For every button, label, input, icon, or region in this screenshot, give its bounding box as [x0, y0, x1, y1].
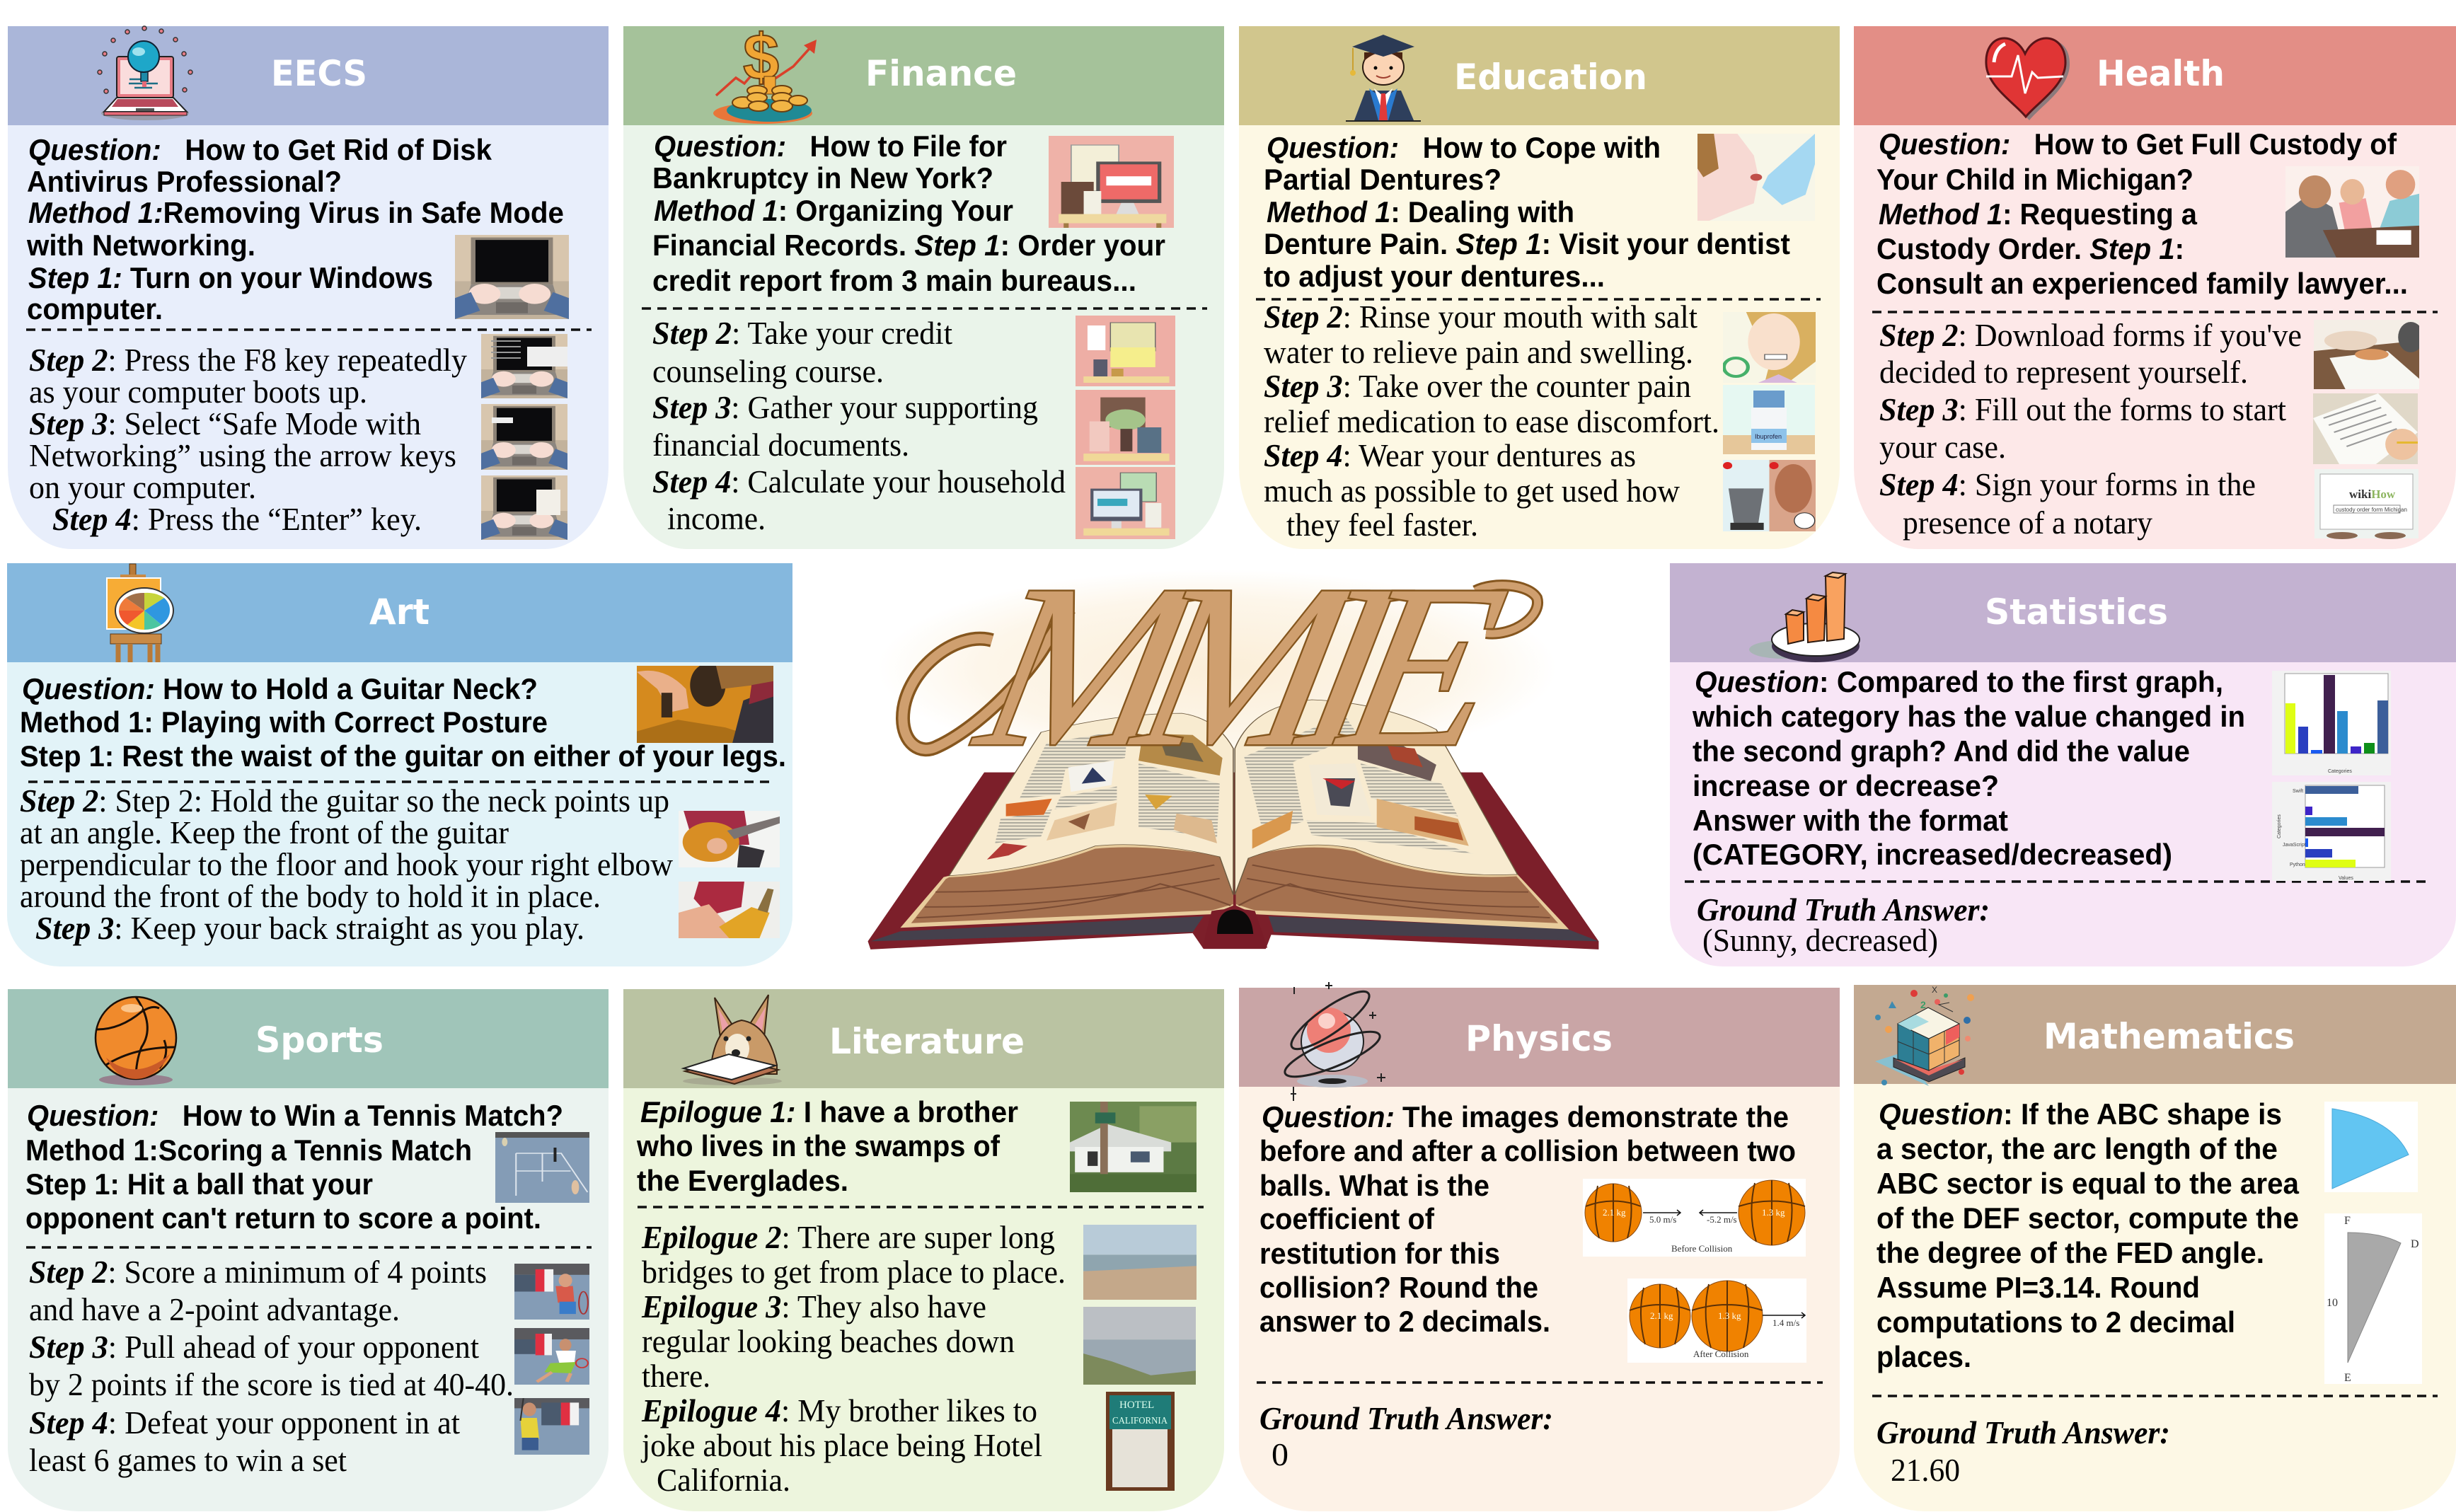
text block: Finance steps: financial documents.	[652, 427, 909, 463]
text block: EECS question: computer.	[27, 292, 163, 325]
text block: EECS question: Method 1:Removing Virus in Safe Mode	[28, 196, 564, 229]
text block: Health steps: your case.	[1879, 429, 2006, 465]
text block: Education question: Method 1: Dealing with	[1267, 195, 1574, 229]
text block: Literature epilogues: Epilogue 3: They also have	[641, 1289, 986, 1325]
icon: basketball	[96, 997, 176, 1085]
text block: Education question	[1264, 131, 1790, 293]
image: lake	[1083, 1307, 1196, 1385]
text block: Health question: Method 1: Requesting a	[1879, 197, 2198, 231]
text block: Health question	[1876, 127, 2408, 300]
text block: Statistics answer: Ground Truth Answer:	[1697, 892, 1990, 928]
chart: sector ABC	[2324, 1102, 2418, 1192]
text block: Art steps: perpendicular to the floor and hook your right elbow	[20, 847, 673, 882]
text block: Finance question: Financial Records. Step 1: Order your	[652, 229, 1165, 262]
text block: EECS question: with Networking.	[26, 229, 255, 262]
text block: Finance question: credit report from 3 main bureaus...	[652, 264, 1136, 297]
text block: EECS steps: Step 4: Press the “Enter” key.	[52, 502, 422, 537]
text block: Education question: to adjust your dentures...	[1264, 260, 1605, 293]
image: tennis court	[495, 1132, 589, 1203]
text block: EECS steps: on your computer.	[29, 470, 256, 505]
text block: EECS question: Antivirus Professional?	[27, 165, 342, 198]
image: after collision: 1.3 kg	[1718, 1310, 1741, 1321]
text block: Literature epilogues: California.	[657, 1462, 790, 1498]
text block: Health steps: decided to represent yourself.	[1879, 354, 2248, 390]
image: before collision	[1583, 1179, 1806, 1257]
heading: Education: Education	[1454, 57, 1647, 98]
text block: Sports question: Question: How to Win a Tennis Match?	[27, 1099, 563, 1133]
icon: heart	[1986, 38, 2070, 120]
image: guitarist front	[679, 811, 780, 867]
text block: Art steps: around the front of the body to hold it in place.	[20, 879, 601, 914]
panel: EECS	[8, 26, 609, 549]
image: family lawyer	[2285, 170, 2419, 258]
text block: Statistics question: the second graph? And did the value	[1693, 734, 2190, 768]
text block: Mathematics answer: 21.60	[1891, 1453, 1960, 1488]
icon: dog reading book	[683, 995, 782, 1085]
text block: Health steps: Step 2: Download forms if you've	[1879, 318, 2302, 353]
text block: Literature epilogues: there.	[642, 1358, 710, 1394]
image: laptop step 3	[481, 404, 567, 470]
text block: Art question: Method 1: Playing with Correct Posture	[20, 705, 548, 739]
heading: Art: Art	[369, 591, 429, 633]
text block: Physics question: collision? Round the	[1259, 1271, 1538, 1304]
text block: Mathematics question: of the DEF sector, compute the	[1876, 1201, 2299, 1235]
text block: Finance question: Bankruptcy in New York?	[652, 161, 993, 195]
chart: vertical bars: Categories	[2328, 769, 2352, 774]
text block: Finance steps: Step 4: Calculate your household	[652, 464, 1066, 500]
text block: Literature epilogues	[640, 1220, 1066, 1498]
text block: Literature epilogue 1	[636, 1095, 1018, 1197]
text block: Physics question: Question: The images demonstrate the	[1262, 1100, 1789, 1134]
text block: Physics answer: 0	[1272, 1437, 1288, 1472]
text block: Education steps: relief medication to ease discomfort.	[1264, 404, 1719, 439]
text block: Health question: Question: How to Get Full Custody of	[1879, 127, 2397, 161]
chart: horizontal bars: Values	[2339, 876, 2353, 881]
text block: EECS steps: Networking” using the arrow keys	[29, 438, 456, 473]
image: tennis player score 1	[514, 1264, 589, 1320]
text block: Sports steps: Step 4: Defeat your opponent in at	[29, 1405, 460, 1441]
text block: Literature epilogues: regular looking beaches down	[642, 1324, 1015, 1359]
text block: Health question: Your Child in Michigan?	[1876, 163, 2193, 196]
text block: Education steps: water to relieve pain and swelling.	[1264, 335, 1693, 370]
text block: Art steps: Step 3: Keep your back straight as you play.	[35, 911, 584, 946]
panel: Finance	[623, 21, 1224, 549]
illustration: open book	[868, 700, 1598, 950]
panel: Physics	[1239, 982, 1840, 1511]
text block: Art question	[20, 672, 786, 773]
text block: Literature epilogue 1: the Everglades.	[637, 1164, 848, 1197]
text block: Literature epilogue 1: who lives in the swamps of	[636, 1129, 1001, 1162]
image: saline and face	[1723, 460, 1816, 531]
text block: Mathematics question: Question: If the ABC shape is	[1879, 1097, 2282, 1131]
icon: easel and colour wheel	[107, 564, 173, 662]
text block: Statistics answer	[1697, 892, 1990, 958]
text block: Art steps	[20, 783, 673, 946]
text block: Mathematics question: ABC sector is equal to the area	[1876, 1167, 2300, 1200]
center illustration: MMIE book	[868, 537, 1598, 950]
text block: Statistics question: increase or decrease?	[1693, 769, 1999, 802]
text block: EECS question	[26, 133, 564, 325]
chart: sector DEF	[2324, 1213, 2422, 1384]
image: wikiHow screen: custody order form Michigan	[2336, 507, 2407, 513]
text block: Physics question: before and after a collision between two	[1259, 1134, 1796, 1167]
heading: EECS: EECS	[271, 53, 367, 94]
image: woman rinsing	[1723, 312, 1816, 383]
text block: Education steps: much as possible to get used how	[1264, 473, 1680, 509]
chart: horizontal bars: Swift	[2293, 789, 2303, 794]
text block: Physics answer: Ground Truth Answer:	[1259, 1401, 1553, 1436]
icon: dollar and coins	[713, 21, 817, 124]
text block: Literature epilogues: Epilogue 2: There are super long	[641, 1220, 1055, 1255]
image: Hotel California sign: CALIFORNIA	[1112, 1416, 1168, 1426]
text block: Literature epilogue 1: Epilogue 1: I have a brother	[640, 1095, 1018, 1129]
heading: Physics: Physics	[1465, 1018, 1613, 1059]
text block: Sports question	[25, 1099, 563, 1235]
heading: Sports: Sports	[255, 1020, 384, 1061]
text block: Art question: Question: How to Hold a Guitar Neck?	[22, 672, 538, 706]
image: wikiHow screen	[2314, 469, 2418, 539]
text block: Health steps: Step 3: Fill out the forms to start	[1879, 392, 2286, 427]
image: laptop step 2	[481, 334, 567, 398]
text block: Statistics question: which category has the value changed in	[1692, 700, 2245, 733]
text block: Education question: Denture Pain. Step 1: Visit your dentist	[1264, 227, 1790, 260]
image: tennis player score 3	[514, 1398, 589, 1455]
text block: Mathematics question: a sector, the arc length of the	[1876, 1132, 2278, 1165]
text block: Education question: Partial Dentures?	[1264, 163, 1501, 196]
panel: Education	[1239, 26, 1840, 549]
text block: Mathematics answer: Ground Truth Answer:	[1876, 1415, 2170, 1450]
image: after collision: 2.1 kg	[1650, 1310, 1673, 1321]
chart: sector DEF: E	[2344, 1372, 2351, 1384]
image: Hotel California sign	[1106, 1392, 1175, 1491]
text block: Health question: Custody Order. Step 1:	[1876, 232, 2184, 265]
text block: Finance question: Question: How to File for	[654, 129, 1007, 163]
image: before collision: -5.2 m/s	[1707, 1214, 1737, 1225]
text block: EECS steps: Step 3: Select “Safe Mode with	[29, 406, 421, 442]
text block: Finance question: Method 1: Organizing Your	[654, 194, 1013, 227]
text block: EECS steps	[29, 342, 467, 537]
title: MMIE: MMIE	[958, 537, 1523, 795]
heading: Statistics: Statistics	[1985, 591, 2168, 633]
panel: Sports	[8, 989, 609, 1511]
icon: math cube: X	[1932, 985, 1937, 995]
image: beach	[1083, 1225, 1197, 1300]
text block: Mathematics question: the degree of the FED angle.	[1876, 1236, 2264, 1269]
text block: Education steps: Step 2: Rinse your mouth with salt	[1264, 299, 1697, 335]
image: laptop step 1	[455, 235, 569, 319]
icon: planet sphere	[1280, 982, 1385, 1101]
panel: Mathematics	[1854, 985, 2456, 1511]
panel: Statistics	[1670, 563, 2456, 966]
text block: Finance steps: counseling course.	[652, 354, 884, 389]
text block: Mathematics question	[1876, 1097, 2300, 1373]
chart: horizontal bars	[2272, 782, 2391, 881]
text block: EECS question: Question: How to Get Rid of Disk	[28, 133, 492, 167]
image: signing forms	[2314, 320, 2419, 389]
text block: Physics question: coefficient of	[1259, 1202, 1435, 1235]
icon: math cube	[1875, 985, 1974, 1086]
text block: Art steps: at an angle. Keep the front of the guitar	[20, 815, 509, 850]
text block: Education steps: they feel faster.	[1286, 507, 1478, 543]
text block: Sports question: Method 1:Scoring a Tennis Match	[25, 1133, 472, 1167]
text block: Physics answer	[1259, 1401, 1553, 1472]
text block: Statistics question: Answer with the format	[1693, 804, 2008, 837]
chart: sector DEF: F	[2344, 1215, 2351, 1227]
image: finance desk computer	[1049, 136, 1174, 228]
image: dentist and patient	[1697, 134, 1815, 221]
panel: Literature	[623, 989, 1224, 1511]
text block: EECS steps: Step 2: Press the F8 key repeatedly	[29, 342, 467, 378]
image: tennis player score 2	[514, 1328, 589, 1385]
text block: Health steps	[1879, 318, 2302, 541]
text block: Literature epilogues: joke about his place being Hotel	[640, 1428, 1042, 1463]
text block: Statistics question: (CATEGORY, increased/decreased)	[1693, 838, 2172, 871]
text block: Sports question: opponent can't return to score a point.	[25, 1201, 541, 1235]
heading: Literature: Literature	[829, 1021, 1025, 1062]
text block: Statistics question: Question: Compared to the first graph,	[1695, 665, 2223, 699]
heading: Health: Health	[2097, 53, 2225, 94]
image: after collision	[1627, 1279, 1806, 1363]
text block: Finance steps: Step 3: Gather your supporting	[652, 390, 1038, 425]
text block: Sports steps: Step 3: Pull ahead of your opponent	[29, 1329, 479, 1365]
icon: dollar and coins: $	[743, 21, 779, 93]
chart: horizontal bars: Categories	[2277, 814, 2282, 838]
image: guitar close-up	[637, 666, 773, 743]
text block: Physics question	[1259, 1100, 1796, 1338]
text block: Finance steps	[652, 316, 1066, 536]
image: swamp house	[1070, 1102, 1197, 1192]
icon: 3D bar chart	[1749, 572, 1860, 662]
text block: Finance question	[652, 129, 1165, 297]
heading: Finance: Finance	[865, 53, 1017, 94]
text block: EECS steps: as your computer boots up.	[29, 374, 367, 410]
text block: Education question: Question: How to Cope with	[1267, 131, 1661, 165]
chart: horizontal bars: JavaScript	[2283, 843, 2306, 848]
icon: laptop with magnifier	[98, 26, 192, 120]
text block: Sports steps: least 6 games to win a set	[29, 1443, 347, 1478]
text block: Education steps: Step 4: Wear your dentures as	[1264, 438, 1636, 473]
panel: Health	[1854, 26, 2456, 549]
image: after collision: 1.4 m/s	[1772, 1317, 1799, 1328]
text block: Mathematics answer	[1876, 1415, 2170, 1488]
text block: Health steps: Step 4: Sign your forms in the	[1879, 467, 2256, 502]
text block: Literature epilogues: Epilogue 4: My brother likes to	[641, 1393, 1037, 1429]
text block: Health question: Consult an experienced family lawyer...	[1876, 267, 2408, 300]
image: before collision: 1.3 kg	[1762, 1207, 1785, 1218]
chart: sector DEF: 10	[2327, 1297, 2338, 1309]
text block: Art steps: Step 2: Step 2: Hold the guitar so the neck points up	[20, 783, 669, 819]
chart: sector DEF: D	[2411, 1238, 2419, 1250]
panel: Art	[7, 563, 792, 966]
text block: Education steps: Step 3: Take over the counter pain	[1264, 369, 1691, 404]
text block: Sports steps: by 2 points if the score is tied at 40-40.	[29, 1367, 514, 1402]
image: finance credit counseling	[1076, 316, 1175, 386]
image: filling forms	[2313, 393, 2418, 464]
image: finance household computer	[1076, 467, 1175, 539]
text block: Sports steps: and have a 2-point advantage.	[29, 1292, 400, 1327]
text block: Sports question: Step 1: Hit a ball that your	[25, 1167, 373, 1201]
image: guitarist posture	[679, 882, 780, 938]
text block: Physics question: restitution for this	[1259, 1237, 1500, 1270]
icon: graduate	[1346, 35, 1421, 121]
text block: Finance steps: Step 2: Take your credit	[652, 316, 952, 351]
text block: Finance steps: income.	[667, 501, 766, 536]
icon: math cube: 2	[1920, 999, 1926, 1010]
text block: Mathematics question: computations to 2 decimal	[1876, 1305, 2235, 1339]
chart: vertical bars	[2272, 671, 2391, 775]
image: before collision: 2.1 kg	[1603, 1207, 1626, 1218]
text block: Sports steps: Step 2: Score a minimum of 4 points	[29, 1254, 487, 1290]
text block: Physics question: answer to 2 decimals.	[1259, 1305, 1550, 1338]
image: medicine bottle	[1723, 385, 1815, 454]
text block: Physics question: balls. What is the	[1259, 1169, 1489, 1202]
text block: Mathematics question: Assume PI=3.14. Round	[1876, 1271, 2200, 1304]
text block: Art question: Step 1: Rest the waist of the guitar on either of your legs.	[20, 739, 786, 773]
text block: Statistics answer: (Sunny, decreased)	[1702, 923, 1938, 958]
image: wikiHow screen: wikiHow	[2349, 487, 2396, 501]
image: finance documents	[1076, 390, 1175, 465]
heading: Mathematics: Mathematics	[2043, 1016, 2295, 1057]
image: after collision: After Collision	[1693, 1349, 1749, 1359]
text block: Mathematics question: places.	[1876, 1340, 1971, 1373]
chart: horizontal bars: Python	[2290, 862, 2305, 867]
image: before collision: Before Collision	[1671, 1243, 1733, 1254]
text block: Literature epilogues: bridges to get from place to place.	[642, 1254, 1066, 1290]
text block: EECS question: Step 1: Turn on your Windows	[28, 261, 433, 294]
image: Hotel California sign: HOTEL	[1119, 1400, 1154, 1411]
image: laptop step 4	[481, 475, 567, 540]
text block: Sports steps	[29, 1254, 514, 1478]
image: medicine bottle: Ibuprofen	[1755, 433, 1782, 440]
image: before collision: 5.0 m/s	[1649, 1214, 1676, 1225]
text block: Education steps	[1264, 299, 1719, 543]
text block: Statistics question	[1692, 665, 2245, 871]
text block: Health steps: presence of a notary	[1903, 505, 2152, 541]
